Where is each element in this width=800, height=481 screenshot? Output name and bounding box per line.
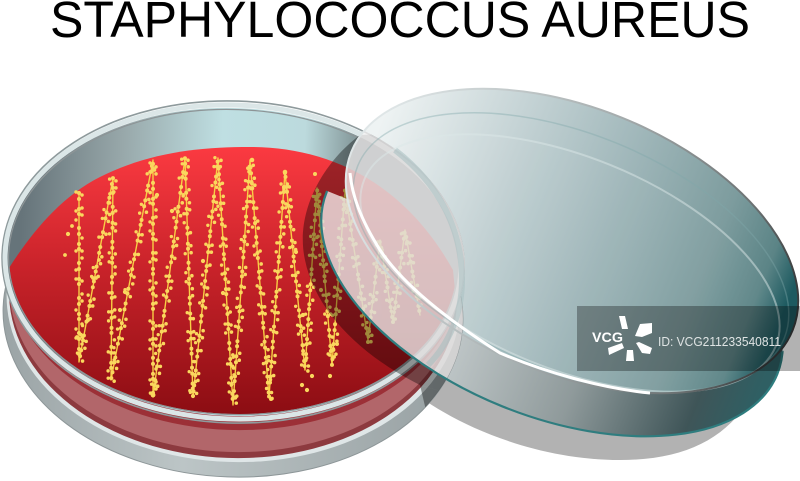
bacterial streak colonies: [76, 157, 423, 407]
lid bottom edge: [320, 190, 784, 438]
petri dish lid details: [320, 88, 800, 438]
watermark logo text: VCG: [592, 329, 623, 345]
lid top surface: [302, 29, 800, 453]
dish rim seen through lid: [395, 150, 462, 365]
lid inner ring: [314, 56, 800, 448]
petri dish base: [0, 93, 470, 481]
lid base: [365, 90, 798, 436]
lid shadow on dish: [302, 134, 465, 408]
red agar side band: [0, 102, 466, 466]
lid inner panel: [324, 82, 800, 444]
streak lines: [79, 158, 420, 405]
watermark bar: [577, 306, 800, 371]
agar surface: [10, 147, 454, 414]
lid side wall: [448, 336, 783, 436]
dish rim: [0, 93, 469, 431]
dish wall interior: [2, 100, 464, 424]
lid glass over dish: [322, 132, 465, 378]
colony dots offset: [82, 160, 423, 407]
watermark id: ID: VCG211233540811: [658, 334, 781, 349]
colony dots: [79, 158, 420, 405]
watermark logo: [608, 316, 652, 361]
rim highlight: [350, 173, 650, 393]
lid rim edge: [302, 29, 800, 453]
watermark: [577, 306, 800, 371]
colony dots left offset: [76, 157, 417, 404]
scattered colonies: [63, 158, 370, 401]
lid shadow on ground: [398, 300, 746, 460]
dish outer body: [0, 130, 469, 481]
